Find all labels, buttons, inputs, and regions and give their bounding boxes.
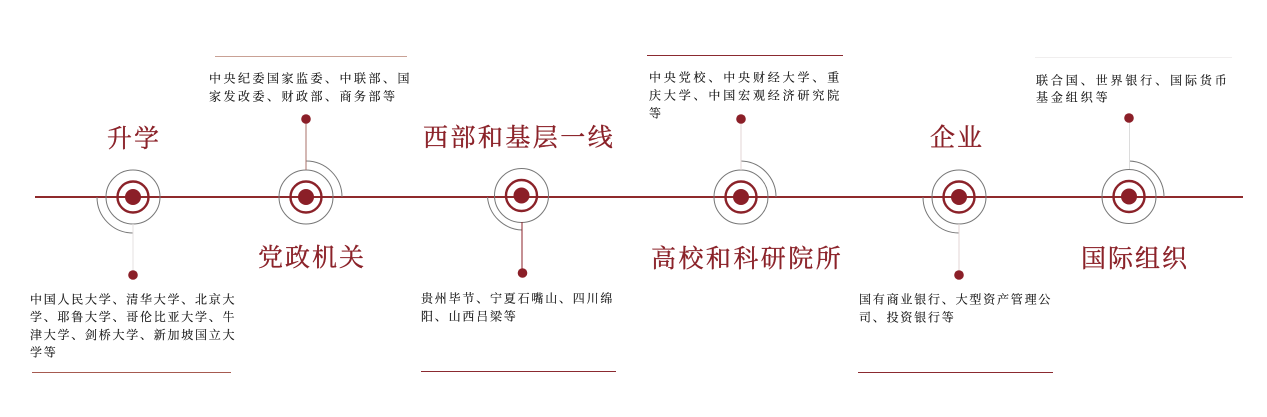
node marker 4	[714, 161, 776, 224]
text block: universities: 学等	[30, 346, 58, 360]
text block: enterprises: 司、投资银行等	[859, 310, 956, 324]
text block: universities: 学、耶鲁大学、哥伦比亚大学、牛	[30, 309, 236, 324]
node marker 5	[923, 170, 986, 233]
connector and dot 4	[736, 114, 746, 170]
panel: 高校和科研院所	[647, 56, 848, 273]
heading: 西部和基层一线: 西部和基层一线	[423, 124, 615, 152]
heading: 升学: 升学	[107, 125, 161, 153]
text block: international organisations: 联合国、世界银行、国际货币	[1036, 72, 1230, 88]
text block: government agencies: 中央纪委国家监委、中联部、国	[209, 70, 412, 86]
text block: international organisations: 基金组织等	[1036, 90, 1111, 104]
text block: universities and institutes: 庆大学、中国宏观经济研究院	[649, 88, 842, 102]
heading: 国际组织: 国际组织	[1081, 245, 1189, 273]
text block: enterprises: 国有商业银行、大型资产管理公	[859, 292, 1052, 306]
node marker 3	[488, 168, 548, 230]
panel: 企业	[858, 124, 1057, 372]
main timeline axis	[35, 196, 1243, 198]
rule line 3	[421, 370, 616, 372]
node marker 1	[97, 170, 160, 233]
connector and dot 3	[518, 222, 527, 278]
rule line 6	[1035, 56, 1232, 58]
text block: western regions: 阳、山西吕梁等	[421, 308, 518, 324]
connector and dot 5	[954, 224, 964, 280]
connector and dot 2	[301, 114, 311, 170]
panel: 国际组织	[1035, 58, 1236, 273]
heading: 高校和科研院所: 高校和科研院所	[651, 245, 843, 273]
node marker 2	[279, 161, 342, 224]
text block: western regions: 贵州毕节、宁夏石嘴山、四川绵	[421, 290, 614, 306]
panel: 升学	[30, 125, 241, 372]
panel: 党政机关	[209, 56, 418, 272]
text block: universities: 中国人民大学、清华大学、北京大	[30, 292, 236, 306]
text block: universities and institutes: 中央党校、中央财经大学、重	[649, 70, 842, 84]
node marker 6	[1102, 161, 1164, 224]
rule line 5	[858, 372, 1053, 374]
heading: 企业: 企业	[930, 124, 984, 152]
heading: 党政机关: 党政机关	[258, 244, 366, 272]
connector and dot 6	[1124, 113, 1134, 169]
text block: government agencies: 家发改委、财政部、商务部等	[209, 88, 398, 104]
rule line 1	[32, 372, 231, 374]
connector and dot 1	[128, 224, 138, 280]
text block: universities and institutes: 等	[649, 106, 664, 120]
rule line 4	[647, 54, 843, 56]
text block: universities: 津大学、剑桥大学、新加坡国立大	[30, 327, 236, 342]
rule line 2	[215, 56, 407, 58]
panel: 西部和基层一线	[421, 124, 619, 372]
